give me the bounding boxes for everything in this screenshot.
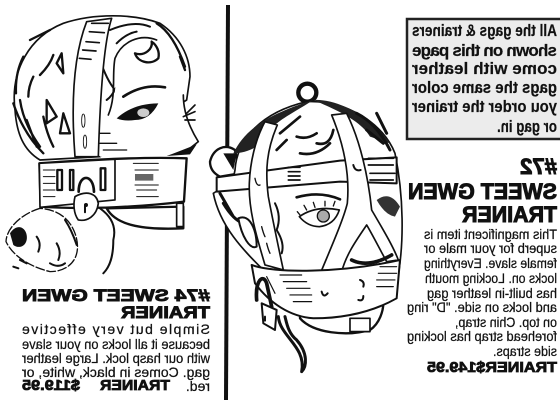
heading: #74: TRAINER — [121, 303, 210, 322]
callout: color note: or gag in. — [497, 117, 557, 136]
callout: color note: you order the trainer — [412, 97, 557, 116]
callout: color note — [412, 21, 557, 136]
text block: #74 description — [22, 321, 211, 394]
text block: #72 description — [407, 226, 557, 359]
vertical divider — [224, 5, 230, 400]
text block: #74 description: gag. Comes in black, white, or — [22, 364, 210, 380]
padlock and side strap — [256, 279, 272, 307]
head strap — [73, 18, 112, 157]
text block: #72 description: This magnificent item is — [424, 226, 557, 242]
heading: #72: #72 — [520, 154, 557, 179]
gag band — [39, 158, 187, 208]
callout: color note: come with leather — [412, 59, 557, 78]
face — [275, 183, 397, 273]
nose detail — [352, 255, 392, 263]
face — [100, 38, 198, 157]
gag band — [252, 260, 400, 318]
price: #74 — [22, 377, 170, 394]
callout: color note: All the gags & trainers — [412, 21, 557, 40]
hair strand — [278, 317, 305, 372]
forehead band — [217, 157, 397, 192]
hair mass — [14, 16, 190, 160]
heading: #72 — [408, 154, 557, 227]
padlock — [79, 178, 94, 192]
text block: #74 description: because it all locks on your slave — [22, 336, 210, 352]
heading: #72: SWEET GWEN — [408, 179, 557, 204]
callout box background — [407, 19, 560, 139]
callout: color note: shown on this page — [412, 41, 557, 60]
text block: #72 description: superb for your male or — [424, 240, 557, 256]
text block: #72 description: and locks on side. "D" ring — [407, 299, 557, 315]
top center strap — [321, 113, 398, 273]
price: #74: TRAINER — [100, 377, 170, 394]
side strap — [249, 122, 283, 270]
text block: #74 description: Simple but very effective — [22, 321, 210, 337]
text block: #72 description: forehead strap has locking — [407, 328, 557, 344]
top ring — [298, 84, 316, 102]
text block: #72 description: side straps. — [493, 343, 557, 359]
illustration: head with single strap trainer — [6, 16, 198, 273]
ear — [238, 217, 257, 247]
hair bun — [6, 208, 78, 272]
head and hair — [213, 102, 402, 283]
callout: color note: gags the same color — [412, 78, 557, 97]
text block: #74 description: red. — [186, 378, 210, 394]
chin — [300, 303, 383, 333]
heading: #74: #74 SWEET GWEN — [22, 286, 210, 305]
hair bun — [210, 147, 240, 177]
text block: #72 description: female slave. Everything — [424, 255, 557, 271]
price: #72: TRAINER$149.95 — [427, 359, 557, 376]
neck and chin — [100, 208, 114, 273]
illustration: head with full cage trainer — [210, 84, 402, 372]
text block: #72 description: on top. Chin strap, — [455, 314, 557, 330]
text block: #72 description: locks on. Locking mouth — [425, 270, 557, 286]
heading: #72: TRAINER — [462, 202, 557, 227]
text block: #72 description: has built-in leather gag — [427, 285, 557, 301]
text block: #74 description: with our hasp lock. Large leather — [22, 350, 211, 366]
heading: #74 — [22, 286, 210, 322]
price: #74: $119.95 — [22, 377, 80, 394]
